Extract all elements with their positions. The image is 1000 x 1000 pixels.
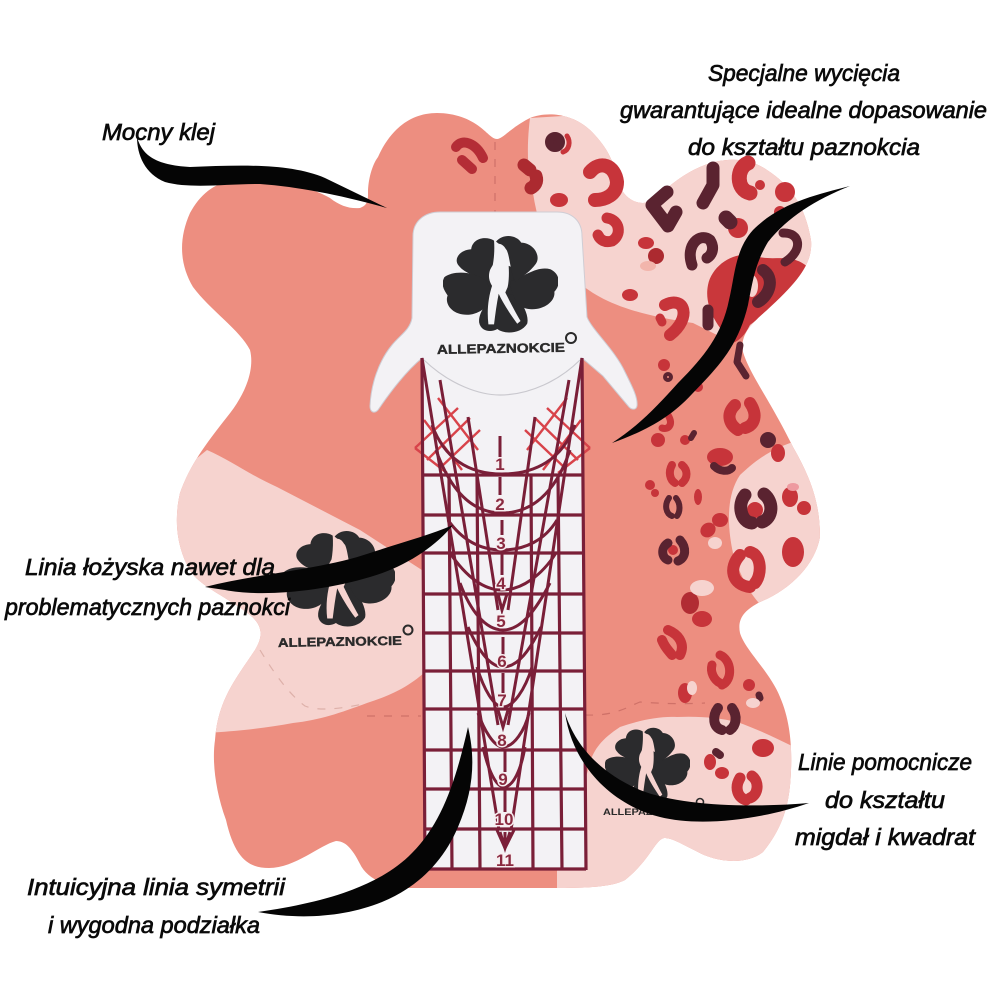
callout text: guide lines: migdał i kwadrat (795, 824, 977, 850)
logo mark (284, 531, 395, 626)
arrow: bed line stroke (205, 525, 453, 593)
brand name: ALLEPAZNOKCIE (603, 807, 695, 818)
leopard spots: filled red (550, 180, 811, 779)
arrow: symmetry stroke (258, 727, 472, 916)
panel: nail form sheet (165, 100, 830, 895)
sizing grid (415, 358, 590, 870)
nail shape curves (422, 358, 582, 848)
light pink areas (165, 100, 830, 895)
logo on left pink area (278, 531, 412, 650)
size numbers: 10 (495, 810, 513, 829)
brand name: ALLEPAZNOKCIE (278, 634, 402, 650)
size numbers: 11 (496, 851, 514, 870)
tab fold line (424, 360, 580, 395)
logo on white tab (437, 236, 576, 357)
size numbers: 9 (498, 770, 508, 789)
callout text: special cutouts: do kształtu paznokcia (688, 134, 920, 160)
size numbers: 1 (495, 455, 505, 474)
white centre tab (370, 212, 637, 520)
callout text: guide lines: do kształtu (825, 787, 945, 813)
size numbers: 6 (497, 652, 507, 671)
callout text: special cutouts (620, 60, 987, 160)
arrow: cutouts stroke (612, 186, 850, 443)
size numbers: 3 (496, 534, 506, 553)
registered mark (566, 333, 576, 343)
callout text: bed line (4, 554, 291, 620)
dashed cut lines (260, 142, 705, 716)
callout text: bed line: problematycznych paznokci (4, 594, 291, 620)
leopard spots: pale highlights (640, 261, 799, 708)
red lattice (415, 398, 590, 473)
red blob (707, 255, 808, 343)
callout text: symmetry line (27, 874, 286, 938)
callout text: special cutouts: Specjalne wycięcia (708, 60, 900, 86)
registered mark (404, 626, 412, 634)
logo on bottom right pink area (603, 728, 704, 818)
grid background (423, 470, 586, 869)
arrow: guide lines stroke (565, 713, 809, 822)
callout text: strong glue: Mocny klej (102, 119, 216, 145)
arrow: glue stroke (137, 137, 387, 208)
leopard spots: dark (549, 136, 798, 755)
form base shape (170, 105, 825, 895)
callout text: guide lines: Linie pomocnicze (798, 749, 972, 775)
callout text: symmetry line: i wygodna podziałka (48, 912, 260, 938)
registered mark (696, 798, 704, 806)
brand name: ALLEPAZNOKCIE (437, 340, 565, 357)
logo mark (605, 728, 690, 798)
size numbers: 8 (497, 731, 507, 750)
size numbers: 2 (495, 495, 505, 514)
size numbers: 7 (497, 691, 507, 710)
size numbers: 4 (496, 574, 506, 593)
leopard spots: red (456, 136, 760, 800)
callout text: guide lines (795, 749, 977, 850)
callout text: special cutouts: gwarantujące idealne dopasowanie (620, 97, 987, 123)
grid lines (422, 358, 586, 870)
size numbers: 5 (496, 612, 506, 631)
logo mark (443, 236, 558, 332)
callout text: bed line: Linia łożyska nawet dla (25, 554, 275, 580)
callout text: symmetry line: Intuicyjna linia symetrii (27, 874, 286, 900)
size numbers (495, 455, 514, 870)
